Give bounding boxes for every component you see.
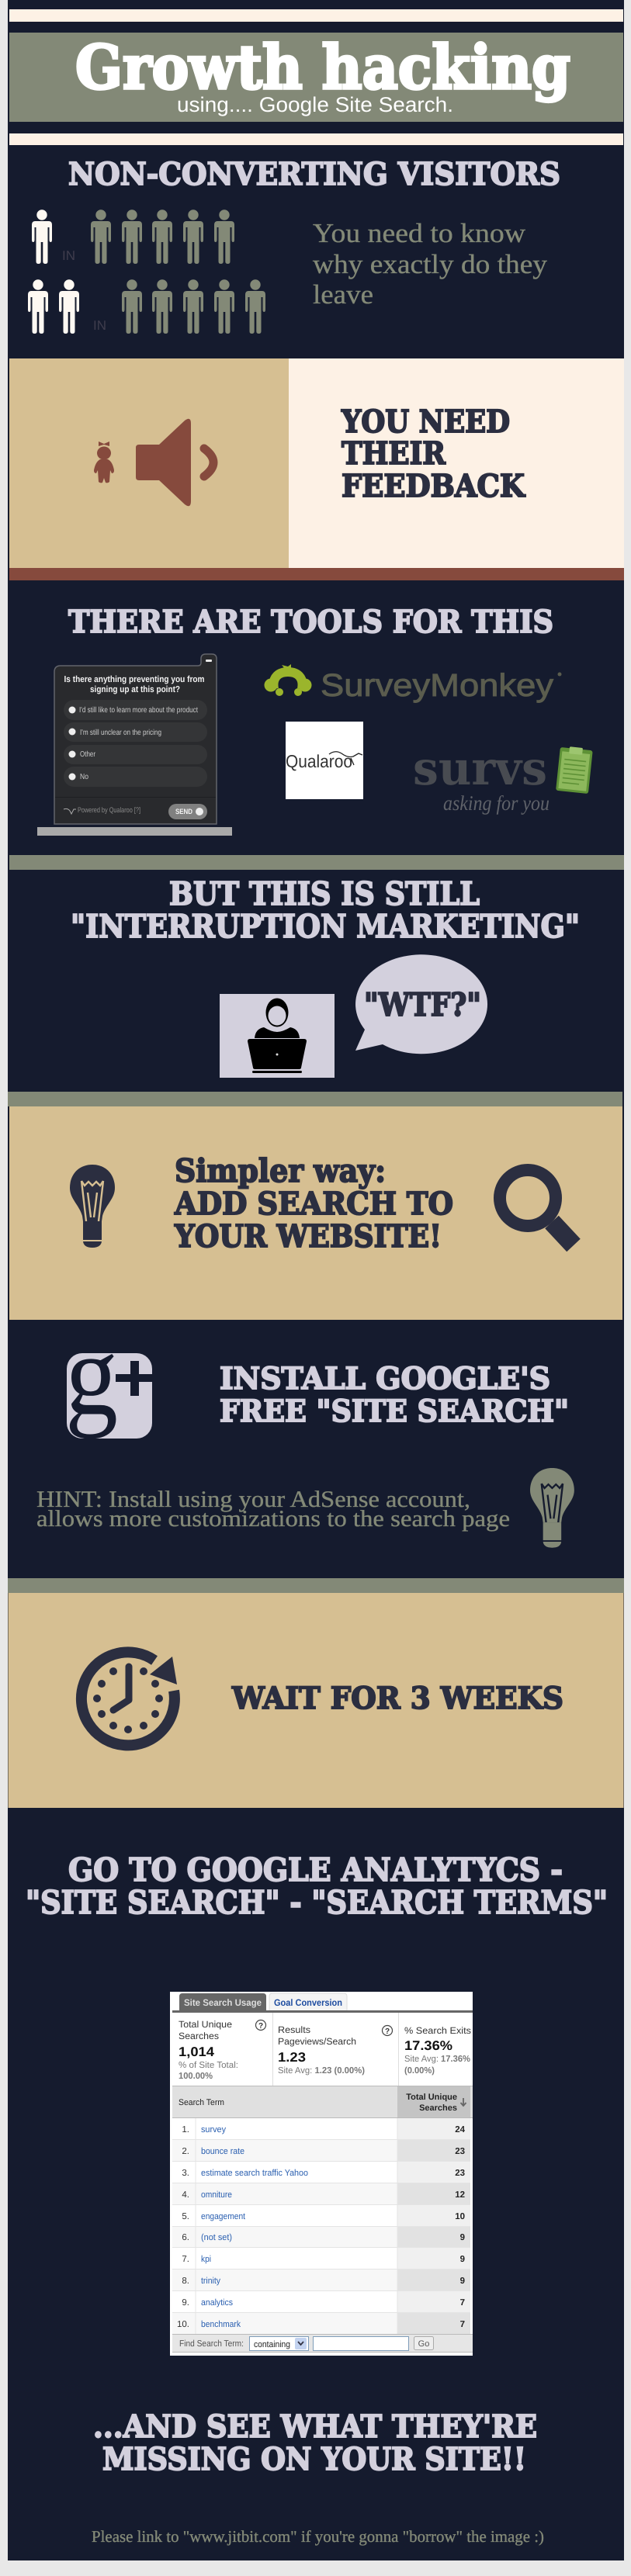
icon: speaker <box>136 419 213 506</box>
panel: closing message <box>92 2408 544 2546</box>
qualaroo logo: Qualaroo <box>286 751 352 771</box>
icon: google plus <box>67 1353 152 1439</box>
survs logo <box>413 742 593 815</box>
heading: "INTERRUPTION MARKETING" <box>71 908 580 945</box>
metric: total unique searches: Searches <box>179 2031 219 2041</box>
heading: NON-CONVERTING VISITORS <box>68 156 560 192</box>
text block: You need to know <box>313 218 526 248</box>
surveymonkey logo: SurveyMonkey <box>321 667 554 703</box>
table rows: (not set) <box>201 2233 232 2242</box>
metric: percent search exits: (0.00%) <box>404 2066 435 2076</box>
search filter bar: containing <box>254 2340 290 2349</box>
text block: leave <box>313 279 373 310</box>
table rows: 7 <box>460 2320 465 2329</box>
send button: SEND <box>175 808 192 816</box>
heading <box>174 1152 453 1255</box>
metric: total unique searches: 1,014 <box>179 2045 215 2059</box>
heading: YOU NEED <box>341 403 510 440</box>
footer note: Please link to "www.jitbit.com" if you're gonna "borrow" the image :) <box>92 2527 544 2546</box>
hint text: HINT: Install using your AdSense account, <box>36 1487 470 1512</box>
panel: title header <box>9 9 623 145</box>
tabs <box>172 1993 473 2013</box>
qualaroo logo <box>286 722 363 799</box>
panel: wait for 3 weeks <box>8 1593 624 1808</box>
icon: 1 in 5 people <box>32 209 234 264</box>
callout: speech bubble: "WTF?" <box>364 986 481 1023</box>
table rows: 6. <box>182 2233 189 2242</box>
table rows: 3. <box>182 2169 189 2178</box>
panel: install google site search <box>37 1353 574 1548</box>
table rows: 24 <box>455 2125 466 2135</box>
table rows: 1. <box>182 2125 189 2135</box>
icon: hint bulb <box>530 1468 574 1548</box>
metric: percent search exits: Site Avg: 17.36% <box>404 2055 470 2064</box>
hint text <box>36 1487 510 1532</box>
subtitle: using.... Google Site Search. <box>177 93 453 116</box>
heading: THERE ARE TOOLS FOR THIS <box>68 604 553 640</box>
table rows: 10 <box>455 2212 465 2221</box>
table rows: 4. <box>182 2190 189 2200</box>
icon: 2 in 5 people: IN <box>93 318 106 333</box>
table rows: 7. <box>182 2255 189 2264</box>
table rows: 9 <box>460 2233 465 2242</box>
heading <box>26 1851 608 1921</box>
table rows: 10. <box>177 2320 189 2329</box>
surveymonkey logo <box>264 664 562 703</box>
table rows: estimate search traffic Yahoo <box>201 2169 308 2178</box>
panel: tools <box>37 604 593 836</box>
metric: total unique searches: 100.00% <box>179 2072 213 2081</box>
qualaroo survey widget <box>54 654 217 824</box>
table rows: trinity <box>201 2277 220 2286</box>
table header <box>172 2086 473 2118</box>
heading <box>93 2408 537 2477</box>
metric: results pageviews per search: Site Avg: 1.23 (0.00%) <box>278 2066 365 2076</box>
icon: clock with arrow <box>81 1652 177 1745</box>
heading: THEIR <box>342 435 446 472</box>
metric: percent search exits <box>404 2025 471 2076</box>
icon: magnifying glass <box>500 1170 574 1245</box>
survs logo: asking for you <box>443 791 550 815</box>
analytics screenshot <box>170 1992 473 2356</box>
metric: total unique searches: ? <box>258 2022 263 2031</box>
table rows: 8. <box>182 2277 189 2286</box>
tabs: Site Search Usage <box>184 1997 262 2008</box>
panel: go to google analytics <box>26 1851 608 2356</box>
icon: person at laptop <box>220 994 335 1078</box>
heading: WAIT FOR 3 WEEKS <box>231 1681 563 1716</box>
metric: results pageviews per search <box>278 2024 393 2076</box>
icon: monkey <box>264 664 312 696</box>
table rows: survey <box>201 2125 226 2135</box>
panel: interruption marketing <box>71 875 580 1078</box>
icon: google plus: g <box>65 1311 118 1439</box>
table rows: 2. <box>182 2147 189 2156</box>
heading <box>341 403 525 504</box>
table rows: 9 <box>460 2277 465 2286</box>
metric: results pageviews per search: Results <box>278 2024 310 2035</box>
heading: ...AND SEE WHAT THEY'RE <box>93 2408 537 2445</box>
table rows: kpi <box>201 2255 211 2264</box>
icon: clipboard <box>556 746 593 794</box>
table rows: 7 <box>460 2298 465 2308</box>
heading: YOUR WEBSITE! <box>174 1218 442 1255</box>
panel: simpler way <box>9 1106 622 1320</box>
search filter bar: Go <box>418 2339 429 2349</box>
table header: Total Unique <box>406 2093 457 2102</box>
table rows: benchmark <box>201 2320 241 2329</box>
table rows: 9 <box>460 2255 465 2264</box>
search filter bar <box>172 2334 473 2353</box>
qualaroo survey widget: Is there anything preventing you from <box>64 675 205 684</box>
table rows: 9. <box>182 2298 189 2308</box>
metric: total unique searches: % of Site Total: <box>179 2061 238 2070</box>
icon: light bulb <box>70 1165 115 1248</box>
hint text: allows more customizations to the search page <box>36 1506 510 1532</box>
heading: Simpler way: <box>175 1152 386 1189</box>
heading <box>220 1361 569 1429</box>
heading: BUT THIS IS STILL <box>169 875 480 912</box>
metric: results pageviews per search: Pageviews/Search <box>278 2036 356 2047</box>
table header: Searches <box>419 2103 457 2113</box>
table rows <box>172 2118 470 2334</box>
icon: 1 in 5 people: IN <box>62 248 75 263</box>
metric: total unique searches: Total Unique <box>179 2019 232 2030</box>
metric: results pageviews per search: 1.23 <box>278 2050 306 2065</box>
heading: FREE "SITE SEARCH" <box>220 1394 569 1429</box>
table rows: omniture <box>201 2190 232 2200</box>
table rows: 5. <box>182 2212 189 2221</box>
heading: FEEDBACK <box>342 468 525 504</box>
heading: GO TO GOOGLE ANALYTYCS - <box>68 1851 563 1889</box>
panel: you need their feedback <box>9 358 624 580</box>
heading: MISSING ON YOUR SITE!! <box>102 2441 526 2477</box>
qualaroo survey widget: signing up at this point? <box>90 685 180 694</box>
metric: percent search exits: 17.36% <box>404 2038 452 2053</box>
callout: speech bubble <box>355 954 487 1054</box>
metric: total unique searches <box>179 2019 265 2081</box>
metric: percent search exits: % Search Exits <box>404 2025 471 2036</box>
survs logo: survs <box>413 742 547 796</box>
icon: child <box>94 441 114 483</box>
heading: INSTALL GOOGLE'S <box>220 1361 550 1397</box>
survey options: I'd still like to learn more about the product <box>79 706 198 715</box>
heading: ADD SEARCH TO <box>174 1186 453 1222</box>
survey options: I'm still unclear on the pricing <box>80 729 161 737</box>
send button <box>168 804 207 819</box>
tabs: Goal Conversion <box>274 1997 342 2008</box>
icon: 2 in 5 people <box>28 279 265 334</box>
table rows: 23 <box>455 2147 465 2156</box>
text block: why exactly do they <box>313 249 548 279</box>
table rows: bounce rate <box>201 2147 244 2156</box>
survey options: No <box>80 773 88 781</box>
survey options <box>64 700 207 787</box>
metric: results pageviews per search: ? <box>385 2027 390 2036</box>
survey options: Other <box>80 750 96 759</box>
panel: non-converting visitors <box>28 156 560 334</box>
search filter bar: Find Search Term: <box>179 2339 244 2349</box>
table rows: 23 <box>455 2169 465 2178</box>
text block <box>313 218 548 310</box>
table rows: engagement <box>201 2212 246 2221</box>
table rows: 12 <box>455 2190 465 2200</box>
table header: Search Term <box>179 2098 224 2107</box>
table rows: analytics <box>201 2298 233 2308</box>
title: Growth hacking <box>75 33 570 103</box>
heading <box>71 875 580 945</box>
qualaroo survey widget: Powered by Qualaroo [?] <box>78 806 140 815</box>
